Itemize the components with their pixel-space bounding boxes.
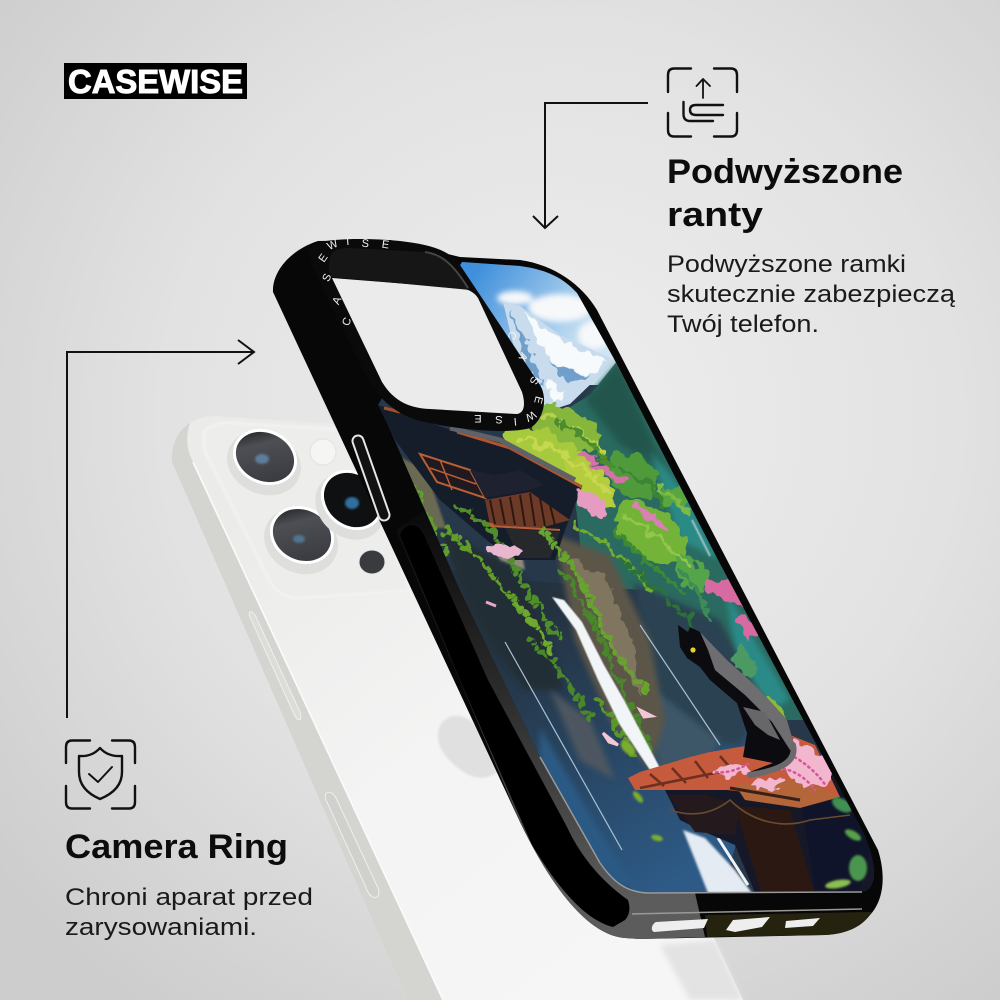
ring opening <box>332 278 524 414</box>
ring lettering: I <box>346 236 350 248</box>
case body <box>273 240 883 939</box>
text: raised edges description: Twój telefon. <box>667 311 819 338</box>
heading: camera ring: Camera Ring <box>65 828 288 866</box>
rocky cliff face <box>555 535 665 770</box>
side button upper <box>249 612 301 720</box>
text: raised edges description: skutecznie zabezpieczą <box>667 281 956 308</box>
snowy mountain <box>503 302 615 412</box>
text: camera ring description <box>65 884 313 941</box>
lens right <box>302 457 398 554</box>
ring lettering: C <box>340 316 354 328</box>
case black side slot <box>400 525 629 927</box>
case artwork: mountain temple with cat <box>370 255 890 900</box>
cat eye <box>690 647 696 653</box>
arrow: to raised edges <box>533 103 648 228</box>
phone lower shadow <box>660 940 743 1000</box>
side button cutout <box>358 441 384 515</box>
text: raised edges description <box>667 251 956 338</box>
white iPhone back <box>172 416 743 1000</box>
roof blossoms <box>712 738 832 792</box>
ring lettering: C <box>505 329 519 341</box>
ring lettering: S <box>361 238 369 250</box>
text: camera ring description: Chroni aparat przed <box>65 884 313 911</box>
ring lettering: W <box>325 237 341 253</box>
lens upper left <box>217 419 311 507</box>
ring lettering: S <box>527 374 541 386</box>
ring lettering: E <box>474 412 482 424</box>
green tuft patches <box>618 738 664 842</box>
microphone sensor <box>359 550 385 574</box>
waterfall upper <box>552 597 660 770</box>
temple building <box>378 405 582 560</box>
red tiled roof <box>628 735 840 808</box>
apple logo <box>438 716 497 778</box>
ring lettering: E <box>317 252 331 265</box>
bright foliage mass <box>494 395 790 728</box>
artwork base <box>370 255 890 900</box>
arrow: to camera ring <box>67 340 254 718</box>
clear case <box>273 240 883 939</box>
flash <box>310 439 336 465</box>
cat tail <box>750 745 794 775</box>
ring lettering: I <box>513 415 517 427</box>
icon: raised edge <box>668 68 737 136</box>
ring lettering: W <box>522 408 538 424</box>
case bottom dark band <box>705 912 872 937</box>
teal mountain right side <box>565 360 810 720</box>
slate cliffs <box>450 570 760 900</box>
text: raised edges description: Podwyższone ramki <box>667 251 906 278</box>
ring lettering: E <box>531 395 545 405</box>
small falls right <box>692 520 710 556</box>
temple structure below roof <box>665 774 874 892</box>
camera ring with CASEWISE lettering <box>309 236 545 431</box>
ring lettering: S <box>495 413 503 425</box>
cliff greenery under temple <box>415 485 695 760</box>
cat grey back <box>700 632 795 750</box>
ring lettering: A <box>330 294 345 307</box>
lens lower <box>253 495 349 586</box>
text: camera ring description: zarysowaniami. <box>65 914 257 941</box>
ring lettering <box>317 236 545 427</box>
ring inner lip <box>329 248 470 290</box>
side button lower <box>325 792 379 898</box>
green leaves bottom right <box>825 794 867 890</box>
ring lettering: A <box>515 350 530 363</box>
heading: raised edges: Podwyższone <box>667 153 903 191</box>
petals <box>603 710 652 745</box>
waterfall lower <box>683 830 752 893</box>
heading: raised edges line two: ranty <box>667 196 763 234</box>
foliage speckle <box>520 412 710 620</box>
icon: shield check <box>66 740 135 808</box>
camera plateau <box>204 423 410 598</box>
bottom ports <box>652 917 820 932</box>
screen glass edge <box>540 757 862 893</box>
black cat <box>678 625 795 777</box>
sky <box>460 262 628 385</box>
pink blossom trees <box>488 451 762 643</box>
clouds <box>497 291 610 349</box>
ring lettering: E <box>381 239 390 251</box>
ring lettering: S <box>320 272 334 284</box>
phone body <box>172 416 743 1000</box>
stream lines <box>505 625 720 850</box>
logo: CASEWISE: CASEWISE <box>68 63 243 100</box>
case grey lower bezel <box>396 510 705 939</box>
phone side band <box>172 423 443 1000</box>
